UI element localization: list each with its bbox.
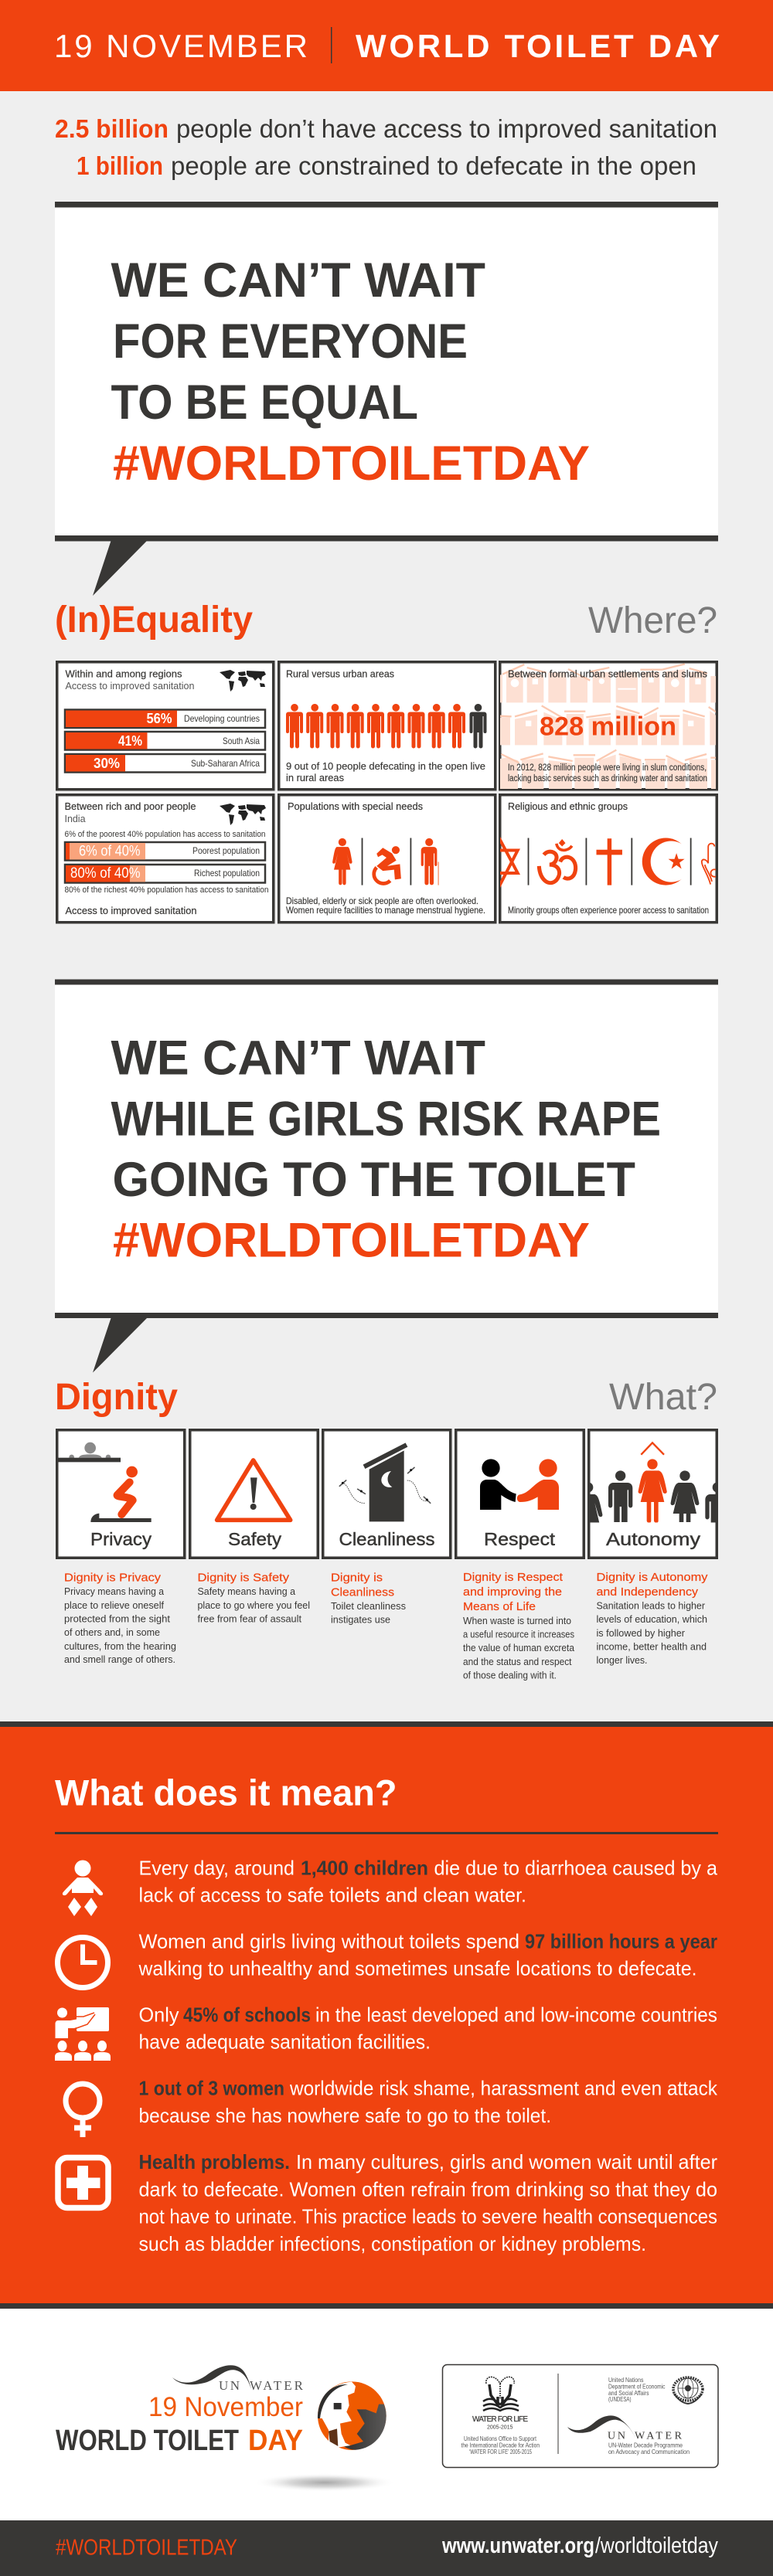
header banner <box>0 0 773 91</box>
text block: dignity is privacy: of others and, in some <box>64 1627 160 1638</box>
icon: united nations emblem <box>673 2377 703 2404</box>
pictogram: ten people <box>286 704 487 748</box>
text block: dignity is respect: the value of human excreta <box>463 1643 574 1653</box>
text block: dignity is autonomy: levels of education, which <box>597 1614 707 1625</box>
bar: richest population <box>65 865 265 882</box>
bubble heading: TO BE EQUAL <box>111 376 418 430</box>
icon: woman <box>332 838 352 885</box>
text block: dignity is privacy: and smell range of others. <box>64 1654 175 1665</box>
text block: dignity is autonomy: longer lives. <box>597 1655 648 1666</box>
icon: group of people <box>591 1442 716 1522</box>
text block: dignity is cleanliness: instigates use <box>331 1615 390 1626</box>
text block: dignity is autonomy <box>597 1571 708 1666</box>
statement: schools: in the least developed and low-income countries <box>315 2003 717 2026</box>
heading: What does it mean? <box>55 1772 397 1813</box>
card label: Privacy <box>90 1529 152 1549</box>
panel: rich and poor: 80% of the richest 40% population has access to sanitation <box>65 885 269 895</box>
statement: children: 1,400 children <box>301 1856 428 1879</box>
panel: within and among regions: Access to improved sanitation <box>65 680 195 692</box>
water for life text: ‘WATER FOR LIFE’ 2005-2015 <box>469 2448 532 2455</box>
text block: dignity is respect: and improving the <box>463 1585 562 1599</box>
panel: special needs: Disabled, elderly or sick people are often overlooked. <box>286 895 478 906</box>
statement: hours: Women and girls living without toilets spend <box>139 1930 519 1953</box>
water for life text: United Nations Office to Support <box>464 2435 536 2442</box>
speech bubble: equality <box>55 202 718 596</box>
icon: om <box>539 839 576 883</box>
panel: rich and poor: 6% of the poorest 40% population has access to sanitation <box>65 830 266 839</box>
panel: rich and poor: Between rich and poor people <box>65 800 196 812</box>
bubble heading <box>111 253 590 491</box>
logo wordmark: UN <box>219 2378 240 2393</box>
bar: sub-saharan africa: 30% <box>94 756 120 771</box>
panel: urban settlements and slums: In 2012, 828 million people were living in slum conditions, <box>508 763 707 773</box>
statement: children: lack of access to safe toilets and clean water. <box>139 1884 526 1907</box>
bar: richest population: 80% of 40% <box>70 865 141 882</box>
panel: urban settlements and slums <box>500 662 717 790</box>
icon: world map <box>220 804 266 825</box>
panel: special needs <box>279 795 495 923</box>
text block: dignity is respect: Means of Life <box>463 1600 536 1613</box>
footer url <box>441 2534 718 2558</box>
panel: urban settlements and slums: lacking basic services such as drinking water and sanitation <box>508 774 707 783</box>
header date: 19 NOVEMBER <box>54 28 308 64</box>
bubble heading: GOING TO THE TOILET <box>113 1153 635 1207</box>
card: autonomy <box>587 1429 718 1559</box>
statement: health <box>139 2150 717 2255</box>
statement: hours <box>138 1930 717 1980</box>
water for life text: 2005-2015 <box>487 2425 513 2431</box>
text block: dignity is privacy: protected from the sight <box>64 1613 171 1624</box>
statement: health: In many cultures, girls and women wait until after <box>296 2150 717 2173</box>
text block: dignity is cleanliness: Dignity is <box>331 1572 383 1584</box>
text block: dignity is safety: Dignity is Safety <box>198 1572 290 1584</box>
icons: woman, wheelchair, elderly man <box>332 838 439 885</box>
card: safety <box>190 1430 318 1558</box>
panel: urban settlements and slums: Between formal urban settlements and slums <box>508 668 707 680</box>
bar: south asia <box>65 732 265 749</box>
icon: handshake <box>480 1459 559 1510</box>
un water logo: on Advocacy and Communication <box>608 2448 690 2455</box>
statement: women: worldwide risk shame, harassment and even attack <box>289 2077 718 2100</box>
un water logo <box>567 2415 690 2455</box>
undesa text: and Social Affairs <box>608 2389 649 2397</box>
footer url: /worldtoiletday <box>595 2534 718 2558</box>
card label: Respect <box>484 1529 556 1549</box>
panel: rich and poor: India <box>65 813 86 824</box>
text block: dignity is cleanliness: Cleanliness <box>331 1585 394 1599</box>
statement: hours: walking to unhealthy and sometimes unsafe locations to defecate. <box>138 1956 697 1980</box>
footer bar <box>0 2520 773 2576</box>
un water logo: UN-Water Decade Programme <box>608 2442 683 2449</box>
statement: children: Every day, around <box>139 1856 295 1879</box>
key statistics: people don’t have access to improved sanitation <box>176 114 717 143</box>
text block: dignity is respect: and the status and respect <box>463 1657 572 1667</box>
panel: within and among regions <box>57 662 274 790</box>
statement: health: Health problems. <box>139 2150 290 2173</box>
card: cleanliness <box>323 1430 451 1558</box>
logo: world toilet day: 19 November <box>148 2392 303 2422</box>
text block: dignity is autonomy: Sanitation leads to higher <box>597 1601 705 1612</box>
text block: dignity is privacy <box>64 1572 176 1665</box>
statement: women <box>139 2077 718 2127</box>
panel: rural versus urban: Rural versus urban areas <box>286 668 394 680</box>
section heading: dignity: Dignity <box>55 1377 178 1418</box>
panel: what does it mean <box>0 1721 773 2309</box>
water for life text: WATER FOR LIFE <box>472 2415 528 2424</box>
header title: WORLD TOILET DAY <box>356 28 720 64</box>
statement: health: dark to defecate. Women often refrain from drinking so that they do <box>139 2177 717 2200</box>
statistic: 828 million: 828 million <box>540 712 676 742</box>
footer url: www.unwater.org <box>441 2534 594 2558</box>
card label: Autonomy <box>606 1529 701 1549</box>
statement: health: such as bladder infections, constipation or kidney problems. <box>139 2232 646 2255</box>
icon: water for life <box>483 2377 519 2411</box>
logo wordmark <box>219 2378 304 2393</box>
text block: dignity is privacy: cultures, from the hearing <box>64 1641 176 1652</box>
icon: wheelchair <box>374 846 401 883</box>
text block: dignity is respect: a useful resource it increases <box>463 1629 574 1640</box>
panel: religious and ethnic groups: Minority groups often experience poorer access to sanitation <box>508 905 709 916</box>
statement: schools <box>139 2003 717 2054</box>
bar: developing countries: Developing countries <box>184 713 260 724</box>
panel: rich and poor: Access to improved sanitation <box>65 905 196 916</box>
text block: dignity is autonomy: Dignity is Autonomy <box>597 1571 708 1584</box>
statement: children <box>139 1856 718 1907</box>
text block: dignity is cleanliness <box>331 1572 406 1626</box>
logo globe <box>318 2381 386 2450</box>
bar: developing countries: 56% <box>147 711 172 726</box>
key statistics <box>55 114 717 180</box>
logo: world toilet day <box>56 2365 396 2492</box>
text block: dignity is respect: Dignity is Respect <box>463 1571 564 1584</box>
bubble heading: WHILE GIRLS RISK RAPE <box>111 1093 661 1147</box>
text block: dignity is safety: free from fear of assault <box>198 1613 302 1624</box>
bar: south asia: South Asia <box>223 736 260 746</box>
partner logos box <box>442 2364 718 2468</box>
card: privacy <box>56 1430 185 1558</box>
icon: clock <box>57 1938 108 1987</box>
text block: dignity is respect: When waste is turned into <box>463 1616 571 1626</box>
panel: rural versus urban: in rural areas <box>286 772 344 783</box>
card: respect <box>456 1430 584 1558</box>
panel: rural versus urban <box>279 662 495 790</box>
section heading: inequality: (In)Equality <box>55 600 253 641</box>
text block: dignity is respect: of those dealing with it. <box>463 1670 557 1681</box>
icon: outhouse with flies <box>339 1445 431 1521</box>
bubble heading: WE CAN’T WAIT <box>111 253 485 308</box>
panel: rural versus urban: 9 out of 10 people defecating in the open live <box>286 760 485 772</box>
panel: religious and ethnic groups: Religious and ethnic groups <box>508 800 628 812</box>
card label: Cleanliness <box>339 1529 434 1549</box>
icon: female symbol <box>66 2084 100 2137</box>
card label: Safety <box>228 1529 282 1549</box>
footer hashtag: #WORLDTOILETDAY <box>56 2536 237 2561</box>
panel: special needs: Populations with special needs <box>288 800 423 812</box>
bar: poorest population: 6% of 40% <box>79 844 141 859</box>
text block: dignity is autonomy: income, better health and <box>597 1641 707 1652</box>
icon: baby <box>63 1861 103 1916</box>
icon: crescent and star <box>642 838 685 885</box>
footer background <box>0 2309 773 2520</box>
icon: world map <box>220 670 266 692</box>
text block: dignity is cleanliness: Toilet cleanliness <box>331 1601 406 1612</box>
water for life text: the International Decade for Action <box>461 2442 540 2449</box>
icon: hamsa hand <box>702 844 718 885</box>
statement: health: not have to urinate. This practice leads to severe health consequences <box>139 2205 717 2228</box>
text block: dignity is autonomy: and Independency <box>597 1585 699 1599</box>
water for life text <box>461 2415 540 2455</box>
bar: developing countries <box>65 709 265 728</box>
panel: rich and poor <box>57 795 274 923</box>
bar: south asia: 41% <box>118 733 142 749</box>
undesa text: United Nations <box>608 2376 643 2384</box>
icon: warning triangle <box>217 1460 291 1520</box>
bar: richest population: Richest population <box>194 868 260 878</box>
undesa text <box>608 2376 666 2403</box>
key statistics: 2.5 billion <box>55 114 169 143</box>
icon: cross <box>597 838 622 885</box>
section heading: what: What? <box>609 1377 717 1418</box>
logo shadow <box>254 2473 396 2492</box>
icon: elderly man <box>421 838 439 885</box>
icon: classroom <box>55 2007 111 2061</box>
undesa text: Department of Economic <box>608 2383 666 2391</box>
bar: sub-saharan africa: Sub-Saharan Africa <box>191 758 260 769</box>
bar: poorest population <box>65 842 265 861</box>
text block: dignity is privacy: Dignity is Privacy <box>64 1572 162 1584</box>
statement: schools: have adequate sanitation facilities. <box>139 2031 431 2054</box>
text block: dignity is safety: place to go where you feel <box>198 1600 310 1611</box>
text block: dignity is autonomy: is followed by higher <box>597 1628 685 1639</box>
statement: women: because she has nowhere safe to go to the toilet. <box>139 2104 551 2127</box>
panel: within and among regions: Within and among regions <box>65 668 182 680</box>
speech bubble: dignity <box>55 980 718 1372</box>
bubble heading: #WORLDTOILETDAY <box>113 1213 590 1267</box>
bubble heading: #WORLDTOILETDAY <box>113 437 590 491</box>
logo: world toilet day: WORLD TOILET <box>56 2425 239 2457</box>
statement: women: 1 out of 3 women <box>139 2077 284 2100</box>
icon: medical cross <box>58 2157 108 2208</box>
statement: hours: 97 billion hours a year <box>525 1930 717 1953</box>
logo swoosh <box>172 2365 251 2389</box>
text block: dignity is safety <box>198 1572 310 1624</box>
key statistics: people are constrained to defecate in the open <box>171 151 696 180</box>
icons: religious symbols <box>483 838 718 885</box>
statement: schools: 45% of schools <box>183 2003 311 2026</box>
un water logo: UN <box>608 2431 625 2442</box>
text block: dignity is privacy: Privacy means having a <box>64 1586 164 1597</box>
bar: sub-saharan africa <box>65 754 265 773</box>
icon: private squat figure <box>56 1443 152 1522</box>
logo: world toilet day: DAY <box>248 2425 303 2457</box>
text block: dignity is respect <box>463 1571 574 1681</box>
statement: schools: Only <box>139 2003 179 2026</box>
bubble heading <box>111 1031 661 1267</box>
text block: dignity is safety: Safety means having a <box>198 1586 295 1597</box>
key statistics: 1 billion <box>77 151 163 180</box>
icon: star of david <box>500 837 520 888</box>
bubble heading: FOR EVERYONE <box>113 314 468 369</box>
bar: poorest population: Poorest population <box>192 845 260 856</box>
statement: children: die due to diarrhoea caused by a <box>434 1856 718 1879</box>
undesa text: (UNDESA) <box>608 2395 632 2403</box>
panel: religious and ethnic groups <box>483 795 718 923</box>
bubble heading: WE CAN’T WAIT <box>111 1031 485 1085</box>
background pattern: houses <box>500 664 717 790</box>
panel: special needs: Women require facilities to manage menstrual hygiene. <box>286 905 485 916</box>
section heading: where: Where? <box>588 600 717 641</box>
un water logo: WATER <box>635 2431 683 2442</box>
text block: dignity is privacy: place to relieve oneself <box>64 1600 165 1611</box>
logo wordmark: WATER <box>250 2378 304 2393</box>
